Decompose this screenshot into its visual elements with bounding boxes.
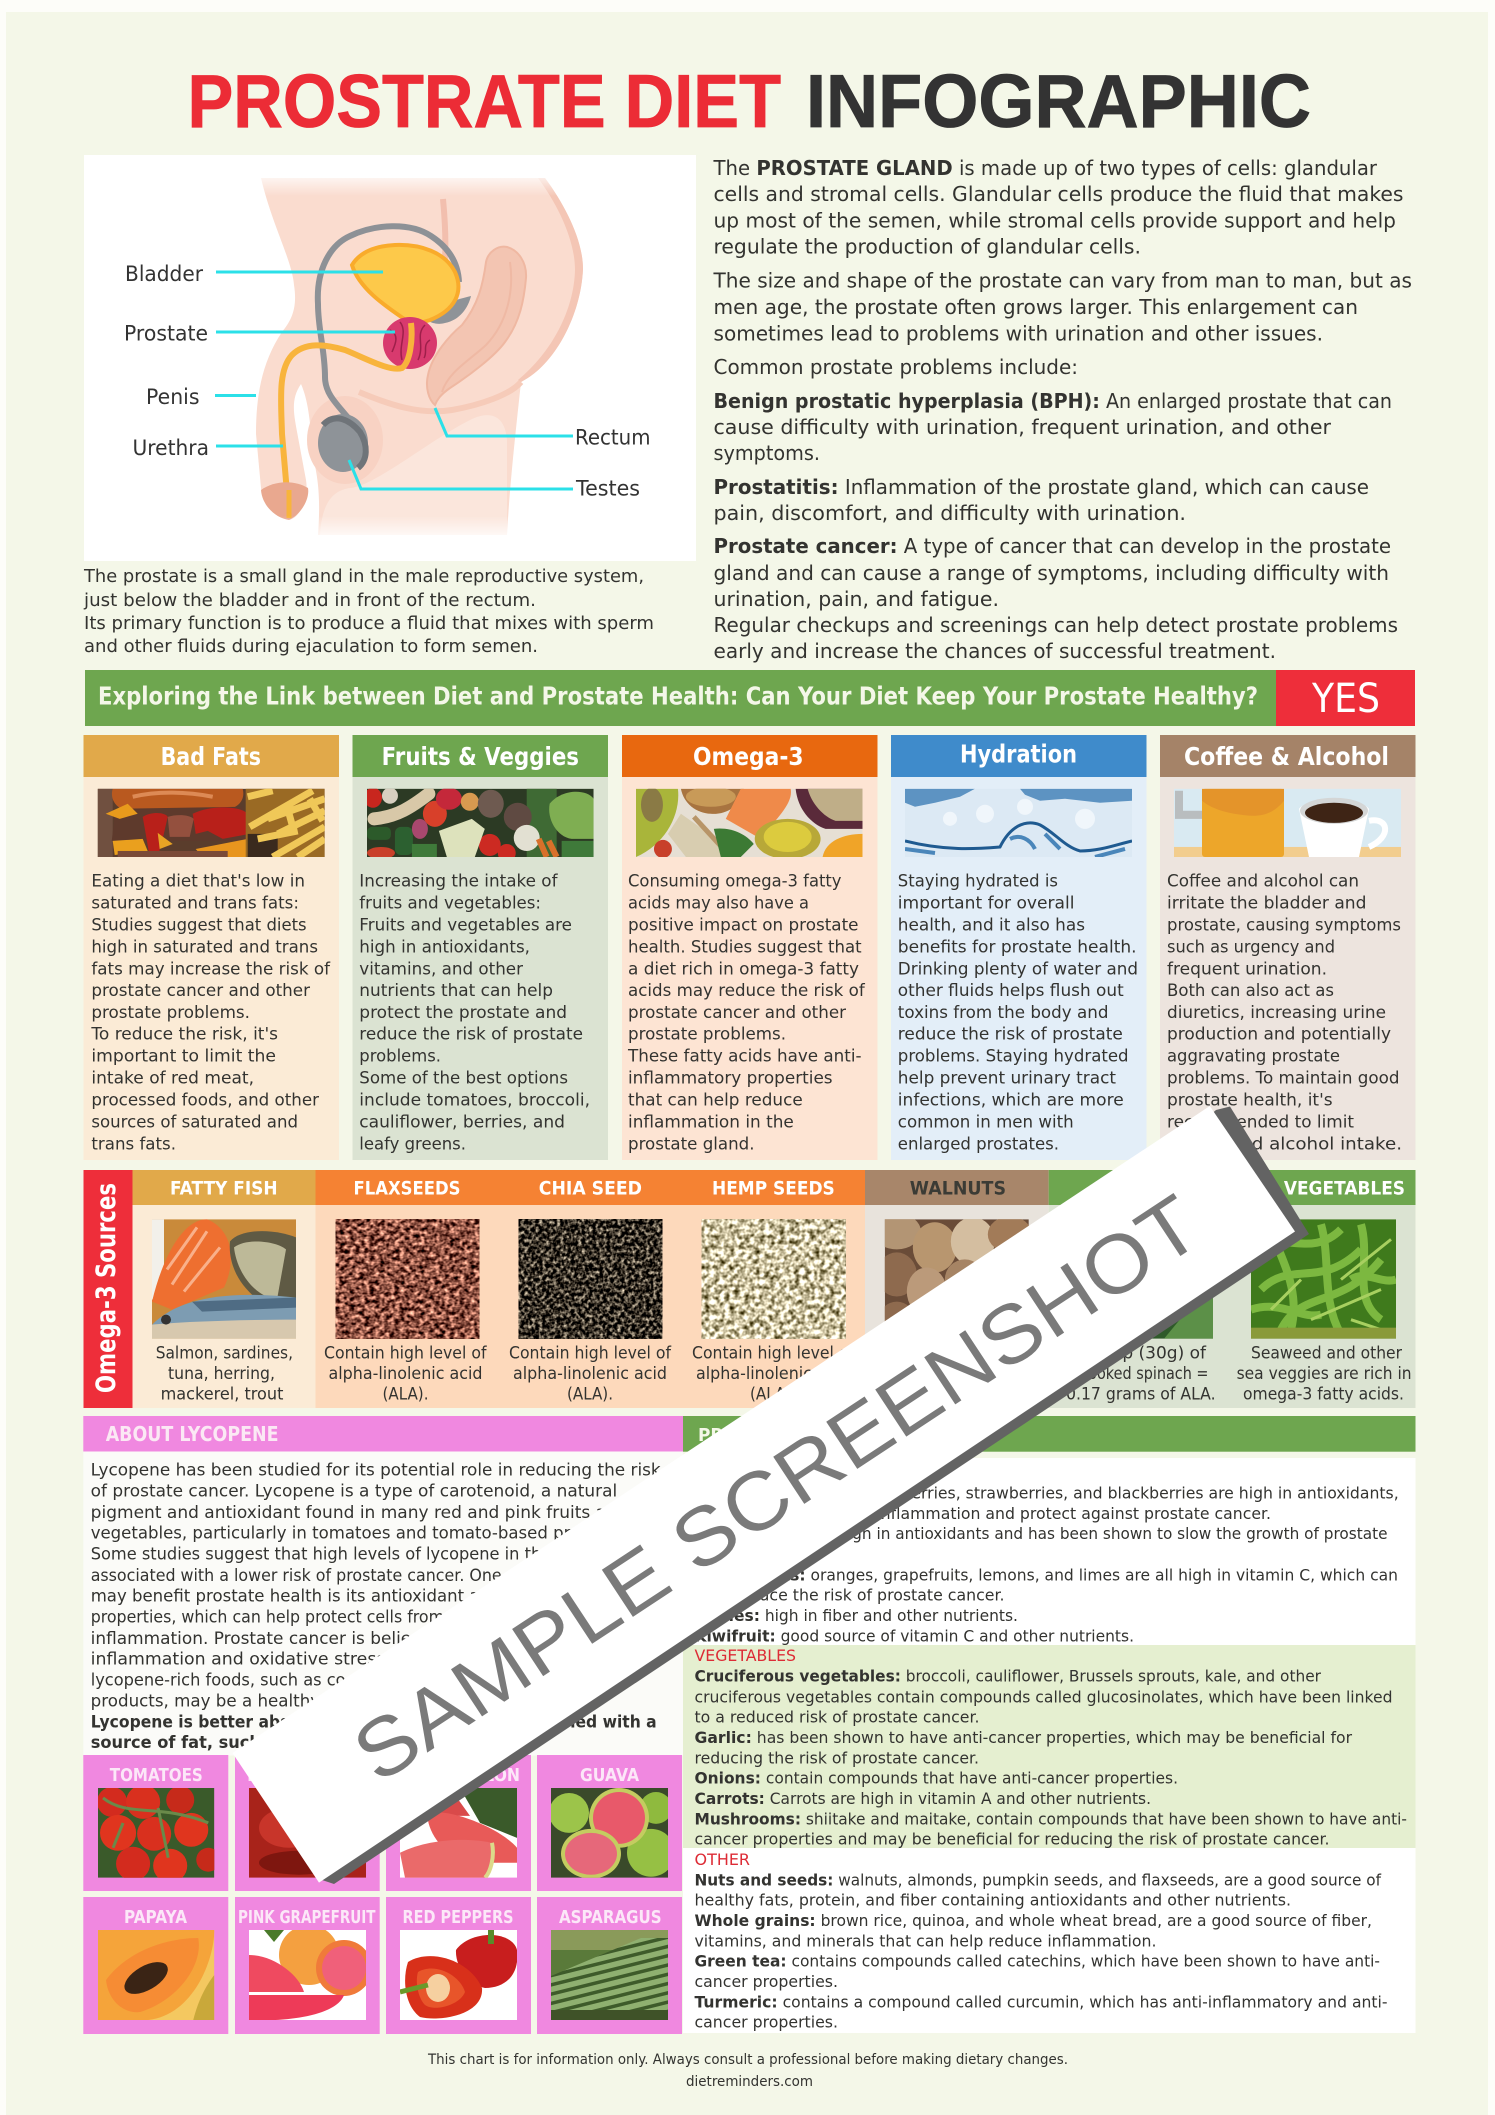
- text: bad fats body: trans fats.: [91, 1134, 176, 1154]
- text: bad fats body: fats may increase the risk of: [91, 959, 331, 979]
- footer: [427, 2052, 1068, 2090]
- text: omega-3 body: acids may also have a: [628, 893, 809, 913]
- text: other foods list: healthy fats, protein, and fiber containing antioxidants and other nutrients.: [694, 1891, 1291, 1910]
- text: bad fats body: Eating a diet that's low in: [91, 872, 305, 892]
- text: vegetables list: Garlic: has been shown to have anti-cancer properties, which may be beneficial for: [694, 1728, 1352, 1747]
- text: hydration body: enlarged prostates.: [898, 1134, 1059, 1154]
- text: other foods list: [694, 1850, 1388, 2032]
- text: lycopene body: inflammation and oxidative stress, so eating a diet rich in: [91, 1650, 591, 1669]
- text: coffee and alcohol body: prostate health, it's: [1167, 1090, 1333, 1110]
- panel: Hydration: Hydration: [960, 740, 1077, 769]
- text: vegetables list: Cruciferous vegetables: broccoli, cauliflower, Brussels sprouts, kale, and other: [694, 1667, 1321, 1686]
- text block: prostate description: [83, 566, 654, 657]
- tile: red peppers: RED PEPPERS: [402, 1907, 514, 1928]
- text: hydration body: help prevent urinary tract: [898, 1068, 1116, 1088]
- column: hemp seeds: HEMP SEEDS: [712, 1177, 835, 1199]
- text: fruits list: which can help reduce inflammation and protect against prostate cancer.: [694, 1504, 1271, 1523]
- text: coffee and alcohol body: such as urgency and: [1167, 937, 1335, 957]
- text: lycopene body: may benefit prostate health is its antioxidant and anti-inflammatory: [91, 1586, 655, 1606]
- text block: prostate gland facts: regulate the production of glandular cells.: [714, 235, 1141, 259]
- text: fruits and veggies body: problems.: [359, 1046, 441, 1066]
- text: vegetables list: [694, 1646, 1407, 1849]
- text: fruits list: [694, 1463, 1399, 1646]
- column: chia seed: alpha-linolenic acid: [513, 1364, 667, 1383]
- text: fruits and veggies body: Some of the best options: [359, 1068, 568, 1088]
- column: spinach: uncooked spinach =: [1062, 1364, 1208, 1383]
- text: omega-3 body: prostate problems.: [628, 1024, 786, 1044]
- panel: Fruits and Veggies: [352, 735, 608, 1160]
- text: hydration body: other fluids helps flush out: [898, 981, 1124, 1001]
- text block: prostate gland facts: pain, discomfort, and difficulty with urination.: [714, 501, 1186, 525]
- text block: prostate gland facts: early and increase the chances of successful treatment.: [714, 639, 1276, 663]
- text: coffee and alcohol body: aggravating prostate: [1167, 1046, 1340, 1066]
- column: hemp seeds: (ALA).: [750, 1384, 796, 1403]
- text: fruits list: help reduce the risk of prostate cancer.: [694, 1586, 1004, 1605]
- text: coffee and alcohol body: frequent urination.: [1167, 959, 1327, 979]
- panel: Fruits and Veggies: Fruits & Veggies: [382, 742, 579, 771]
- column: chia seed: Contain high level of: [509, 1343, 672, 1362]
- text: coffee and alcohol body: recommended to limit: [1167, 1112, 1354, 1132]
- text: other foods list: cancer properties.: [694, 2013, 838, 2032]
- tile: pink grapefruit: [235, 1897, 380, 2034]
- text: coffee and alcohol body: diuretics, increasing urine: [1167, 1003, 1386, 1023]
- text: hydration body: problems. Staying hydrated: [898, 1046, 1129, 1066]
- text: vegetables list: to a reduced risk of prostate cancer.: [694, 1708, 980, 1727]
- text: vegetables list: VEGETABLES: [694, 1646, 796, 1665]
- text: hydration body: health, and it also has: [898, 915, 1085, 935]
- column: sea vegetables: SEA VEGETABLES: [1241, 1177, 1405, 1199]
- text: fruits list: Apples: high in fiber and other nutrients.: [694, 1606, 1018, 1625]
- text: vegetables list: Mushrooms: shiitake and maitake, contain compounds that have been shown to have anti-: [694, 1809, 1407, 1828]
- heading: about lycopene: ABOUT LYCOPENE: [106, 1422, 278, 1446]
- column: spinach: 0.17 grams of ALA.: [1066, 1384, 1216, 1403]
- column: sea vegetables: omega-3 fatty acids.: [1243, 1384, 1404, 1403]
- text: hydration body: reduce the risk of prostate: [898, 1024, 1123, 1044]
- text: coffee and alcohol body: prostate, causing symptoms: [1167, 915, 1401, 935]
- column: sea vegetables: sea veggies are rich in: [1237, 1364, 1412, 1383]
- text: hydration body: Drinking plenty of water and: [898, 959, 1138, 979]
- text: coffee and alcohol body: coffee and alcohol intake.: [1167, 1134, 1402, 1154]
- text: lycopene body: vegetables, particularly in tomatoes and tomato-based products.: [91, 1524, 631, 1542]
- tile: tomatoes: [83, 1755, 228, 1891]
- text: other foods list: Whole grains: brown rice, quinoa, and whole wheat bread, are a good source of fiber,: [694, 1911, 1372, 1930]
- column: chia seed: [509, 1177, 672, 1403]
- text: bad fats body: Studies suggest that diets: [91, 915, 307, 935]
- text: lycopene body: properties, which can help protect cells from damage and reduce: [91, 1608, 608, 1627]
- badge: YES: [1276, 670, 1415, 726]
- label: Bladder: Bladder: [125, 262, 203, 286]
- column backgrounds: [84, 1170, 1416, 1408]
- column: spinach: SPINACH: [1100, 1177, 1180, 1199]
- sidebar label: Omega-3 Sources: Omega-3 Sources: [91, 1183, 122, 1393]
- text: bad fats body: saturated and trans fats:: [91, 893, 299, 913]
- photo: fruits and vegetables: [367, 788, 594, 857]
- tile: tomatoes: TOMATOES: [110, 1765, 203, 1786]
- watermark: sample screenshot: [232, 1106, 1309, 1884]
- photo: beer and coffee: [1174, 788, 1401, 857]
- panel: Omega-3 sources: [84, 1170, 1416, 1408]
- text: fruits and veggies body: include tomatoes, broccoli,: [359, 1090, 590, 1110]
- label: Urethra: Urethra: [132, 436, 209, 460]
- text: lycopene body: source of fat, such as olive oil.: [91, 1733, 371, 1752]
- text: bad fats body: high in saturated and trans: [91, 937, 318, 957]
- text: fruits and veggies body: high in antioxidants,: [359, 937, 530, 957]
- watermark: sample screenshot: SAMPLE SCREENSHOT: [338, 1178, 1216, 1800]
- text block: prostate gland facts: cells and stromal cells. Glandular cells produce the fluid that makes: [714, 182, 1404, 206]
- column: flaxseeds: (ALA).: [382, 1384, 428, 1403]
- text: lycopene body: Lycopene is better absorbed by the body when consumed with a: [91, 1713, 657, 1732]
- text: bad fats body: To reduce the risk, it's: [90, 1024, 278, 1044]
- title: [188, 59, 1311, 143]
- column: spinach: [1062, 1177, 1216, 1403]
- text: bad fats body: prostate problems.: [91, 1003, 250, 1023]
- panel: anatomy diagram: [84, 155, 696, 561]
- text: vegetables list: cancer properties and may be beneficial for reducing the risk of prostate cancer.: [694, 1830, 1330, 1849]
- panel: Coffee and Alcohol: Coffee & Alcohol: [1184, 742, 1389, 771]
- column: sea vegetables: [1237, 1177, 1412, 1403]
- label: Testes: Testes: [575, 477, 640, 501]
- text: hydration body: toxins from the body and: [898, 1003, 1108, 1023]
- column: flaxseeds: Contain high level of: [324, 1343, 488, 1362]
- column: hemp seeds: alpha-linolenic acid: [696, 1364, 850, 1383]
- text: coffee and alcohol body: problems. To maintain good: [1167, 1068, 1400, 1088]
- text: fruits and veggies body: protect the prostate and: [359, 1003, 567, 1023]
- column: fatty fish: Salmon, sardines,: [156, 1343, 293, 1362]
- text: hydration body: benefits for prostate health.: [898, 937, 1137, 957]
- panel: Omega-3: [622, 735, 878, 1160]
- column: walnuts: [873, 1177, 1032, 1339]
- column: fatty fish: tuna, herring,: [168, 1364, 275, 1383]
- text: bad fats body: sources of saturated and: [91, 1112, 298, 1132]
- photo: burger and fries: [98, 788, 325, 857]
- text: lycopene body: lycopene-rich foods, such as cooked tomatoes and tomato-based: [91, 1671, 621, 1690]
- text: vegetables list: Carrots: Carrots are high in vitamin A and other nutrients.: [694, 1789, 1151, 1808]
- text: lycopene body: of prostate cancer. Lycopene is a type of carotenoid, a natural: [91, 1482, 617, 1501]
- text: lycopene body: [91, 1460, 661, 1752]
- text: vegetables list: cruciferous vegetables contain compounds called glucosinolates, which have been linked: [694, 1687, 1392, 1706]
- tile: pink grapefruit: PINK GRAPEFRUIT: [238, 1907, 376, 1928]
- tile: tomato paste: TOMATO PASTE: [245, 1765, 370, 1786]
- text: bad fats body: processed foods, and other: [91, 1090, 320, 1110]
- text: lycopene body: Lycopene has been studied for its potential role in reducing the risk: [91, 1460, 661, 1480]
- title: INFOGRAPHIC: [806, 59, 1311, 143]
- badge: YES: YES: [1311, 676, 1380, 722]
- photo: water splash: [905, 788, 1132, 857]
- text: other foods list: OTHER: [694, 1850, 750, 1869]
- text: other foods list: Nuts and seeds: walnuts, almonds, pumpkin seeds, and flaxseeds, are a good source of: [694, 1870, 1381, 1889]
- text: coffee and alcohol body: [1167, 872, 1402, 1154]
- text: other foods list: Green tea: contains compounds called catechins, which have been shown to have anti-: [694, 1952, 1380, 1971]
- text: hydration body: [898, 872, 1138, 1154]
- tile: papaya: PAPAYA: [124, 1907, 187, 1928]
- panel: Coffee and Alcohol: [1160, 735, 1416, 1160]
- text: omega-3 body: that can help reduce: [628, 1090, 803, 1110]
- text block: prostate gland facts: Common prostate problems include:: [714, 355, 1078, 379]
- text: omega-3 body: health. Studies suggest that: [628, 937, 862, 957]
- text: hydration body: important for overall: [898, 893, 1074, 913]
- text: fruits and veggies body: nutrients that can help: [359, 981, 553, 1001]
- text: vegetables list: Onions: contain compounds that have anti-cancer properties.: [694, 1769, 1178, 1788]
- tile: tomato paste: [235, 1755, 380, 1891]
- tile: watermelon: [386, 1755, 531, 1891]
- text: lycopene body: inflammation. Prostate cancer is believed to be linked to chronic: [91, 1629, 637, 1648]
- text: omega-3 body: These fatty acids have anti-: [627, 1046, 862, 1066]
- panel: prostate healthy foods: [683, 1416, 1416, 2033]
- footer: dietreminders.com: [686, 2074, 813, 2090]
- title: PROSTRATE DIET: [188, 59, 781, 143]
- text block: prostate description: just below the bladder and in front of the rectum.: [83, 590, 536, 611]
- text: bad fats body: prostate cancer and other: [91, 981, 311, 1001]
- text: fruits list: Pomegranate: is high in antioxidants and has been shown to slow the growth of prostate: [694, 1524, 1388, 1543]
- text: bad fats body: important to limit the: [91, 1046, 276, 1066]
- text: bad fats body: [90, 872, 331, 1154]
- text block: prostate gland facts: men age, the prostate often grows larger. This enlargement can: [714, 295, 1358, 319]
- text: hydration body: common in men with: [898, 1112, 1074, 1132]
- label: Prostate: Prostate: [124, 321, 208, 345]
- text: omega-3 body: prostate cancer and other: [628, 1003, 847, 1023]
- tile: asparagus: ASPARAGUS: [559, 1907, 662, 1928]
- text: lycopene body: products, may be a healthy choice for your prostate.: [91, 1691, 531, 1710]
- text: lycopene body: pigment and antioxidant found in many red and pink fruits and: [91, 1503, 628, 1522]
- photo: omega-3 foods: [636, 788, 862, 857]
- footer: This chart is for information only. Always consult a professional before making dietary changes.: [427, 2052, 1068, 2068]
- text block: prostate gland facts: Prostate cancer: A type of cancer that can develop in the prostate: [714, 534, 1391, 558]
- text: coffee and alcohol body: production and potentially: [1167, 1024, 1391, 1044]
- column: hemp seeds: [692, 1177, 855, 1403]
- tile: asparagus: [537, 1897, 682, 2034]
- panel: Bad Fats: Bad Fats: [161, 742, 261, 771]
- text: fruits and veggies body: Fruits and vegetables are: [359, 915, 572, 935]
- tile: red peppers: [386, 1897, 531, 2034]
- text: fruits and veggies body: Increasing the intake of: [359, 872, 558, 892]
- tile: papaya: [83, 1897, 228, 2034]
- text block: prostate gland facts: sometimes lead to problems with urination and other issues.: [714, 322, 1323, 346]
- text block: prostate gland facts: gland and can cause a range of symptoms, including difficulty with: [714, 561, 1389, 585]
- text: omega-3 body: inflammatory properties: [628, 1068, 833, 1088]
- text block: prostate description: and other fluids during ejaculation to form semen.: [84, 636, 538, 657]
- column: flaxseeds: FLAXSEEDS: [354, 1177, 460, 1199]
- column: sea vegetables: Seaweed and other: [1251, 1343, 1402, 1362]
- text: lycopene body: associated with a lower risk of prostate cancer. One way lycopene: [91, 1566, 616, 1585]
- text: fruits and veggies body: [359, 872, 590, 1154]
- text: fruits list: cancer cells.: [694, 1544, 794, 1564]
- pointer lines: [215, 272, 573, 489]
- banner: diet link question: [85, 670, 1415, 726]
- column: spinach: 1 cup (30g) of: [1086, 1343, 1207, 1362]
- text block: prostate gland facts: Regular checkups and screenings can help detect prostate problems: [714, 613, 1398, 637]
- text: omega-3 body: prostate gland.: [628, 1134, 754, 1154]
- text block: prostate gland facts: Benign prostatic hyperplasia (BPH): An enlarged prostate that can: [714, 389, 1392, 413]
- tile: guava: [537, 1755, 682, 1891]
- text: coffee and alcohol body: Coffee and alcohol can: [1167, 872, 1359, 892]
- column: hemp seeds: Contain high level of: [692, 1343, 855, 1362]
- column: fatty fish: FATTY FISH: [170, 1177, 278, 1199]
- label: Penis: Penis: [146, 385, 200, 409]
- text: fruits list: FRUITS: [694, 1463, 746, 1482]
- text: omega-3 body: positive impact on prostate: [628, 915, 858, 935]
- text: hydration body: infections, which are more: [898, 1090, 1124, 1110]
- text: omega-3 body: [627, 872, 866, 1154]
- text: omega-3 body: acids may reduce the risk of: [628, 981, 866, 1001]
- column: fatty fish: [152, 1177, 296, 1403]
- panel: Omega-3: Omega-3: [693, 742, 804, 771]
- text: other foods list: Turmeric: contains a compound called curcumin, which has anti-inflammatory and anti-: [694, 1992, 1388, 2011]
- text block: prostate gland facts: urination, pain, and fatigue.: [714, 587, 999, 611]
- banner: diet link question: Exploring the Link between Diet and Prostate Health: Can Your Diet Keep Your Prostate Healthy?: [98, 682, 1258, 710]
- text: bad fats body: intake of red meat,: [91, 1068, 254, 1088]
- text block: prostate gland facts: The PROSTATE GLAND is made up of two types of cells: glandular: [713, 156, 1378, 180]
- text block: prostate gland facts: Prostatitis: Inflammation of the prostate gland, which can cause: [714, 475, 1369, 499]
- text: omega-3 body: a diet rich in omega-3 fatty: [628, 959, 859, 979]
- text: fruits and veggies body: leafy greens.: [359, 1134, 466, 1154]
- text: fruits and veggies body: vitamins, and other: [359, 959, 524, 979]
- text: fruits list: Citrus fruits: oranges, grapefruits, lemons, and limes are all high in vitamin C, which can: [694, 1566, 1398, 1585]
- label: Rectum: Rectum: [575, 426, 650, 450]
- text: omega-3 body: Consuming omega-3 fatty: [628, 872, 842, 892]
- text: vegetables list: reducing the risk of prostate cancer.: [694, 1748, 979, 1767]
- text block: prostate gland facts: symptoms.: [714, 441, 820, 465]
- text block: prostate description: The prostate is a small gland in the male reproductive system,: [83, 566, 644, 587]
- text: coffee and alcohol body: irritate the bladder and: [1167, 893, 1366, 913]
- column: fatty fish: mackerel, trout: [161, 1384, 284, 1403]
- text block: prostate gland facts: The size and shape of the prostate can vary from man to man, but as: [713, 269, 1412, 293]
- text: other foods list: vitamins, and minerals that can help reduce inflammation.: [694, 1931, 1156, 1950]
- tile: guava: GUAVA: [580, 1765, 639, 1786]
- column: walnuts: WALNUTS: [910, 1177, 1006, 1199]
- column: chia seed: (ALA).: [567, 1384, 613, 1403]
- column: chia seed: CHIA SEED: [539, 1177, 642, 1199]
- text block: prostate gland facts: up most of the semen, while stromal cells provide support and help: [714, 209, 1396, 233]
- heading: prostate healthy foods: PROSTATE-HEALTHY FOODS: [698, 1425, 960, 1446]
- text: fruits and veggies body: reduce the risk of prostate: [359, 1024, 583, 1044]
- panel: Hydration: [891, 735, 1146, 1160]
- text: hydration body: Staying hydrated is: [898, 872, 1058, 892]
- text: coffee and alcohol body: Both can also act as: [1167, 981, 1334, 1001]
- illustration: male reproductive anatomy: [256, 170, 591, 542]
- text: fruits and veggies body: cauliflower, berries, and: [359, 1112, 565, 1132]
- panel: about lycopene: [83, 1416, 683, 2034]
- tile: watermelon: WATERMELON: [397, 1765, 520, 1786]
- text: lycopene body: Some studies suggest that high levels of lycopene in the blood are: [91, 1545, 633, 1564]
- text: omega-3 body: inflammation in the: [628, 1112, 794, 1132]
- panel: Bad Fats: [84, 735, 339, 1160]
- text: fruits and veggies body: fruits and vegetables:: [359, 893, 541, 913]
- text: fruits list: Berries: blueberries, raspberries, strawberries, and blackberries are high in antioxidants,: [694, 1483, 1399, 1502]
- text block: prostate gland facts: cause difficulty with urination, frequent urination, and other: [714, 415, 1332, 439]
- text block: prostate description: Its primary function is to produce a fluid that mixes with sperm: [84, 613, 654, 634]
- column: flaxseeds: [324, 1177, 488, 1403]
- column: flaxseeds: alpha-linolenic acid: [328, 1364, 482, 1383]
- text: fruits list: Kiwifruit: good source of vitamin C and other nutrients.: [694, 1627, 1134, 1646]
- text block: prostate gland facts: [713, 156, 1412, 663]
- text: other foods list: cancer properties.: [694, 1972, 838, 1991]
